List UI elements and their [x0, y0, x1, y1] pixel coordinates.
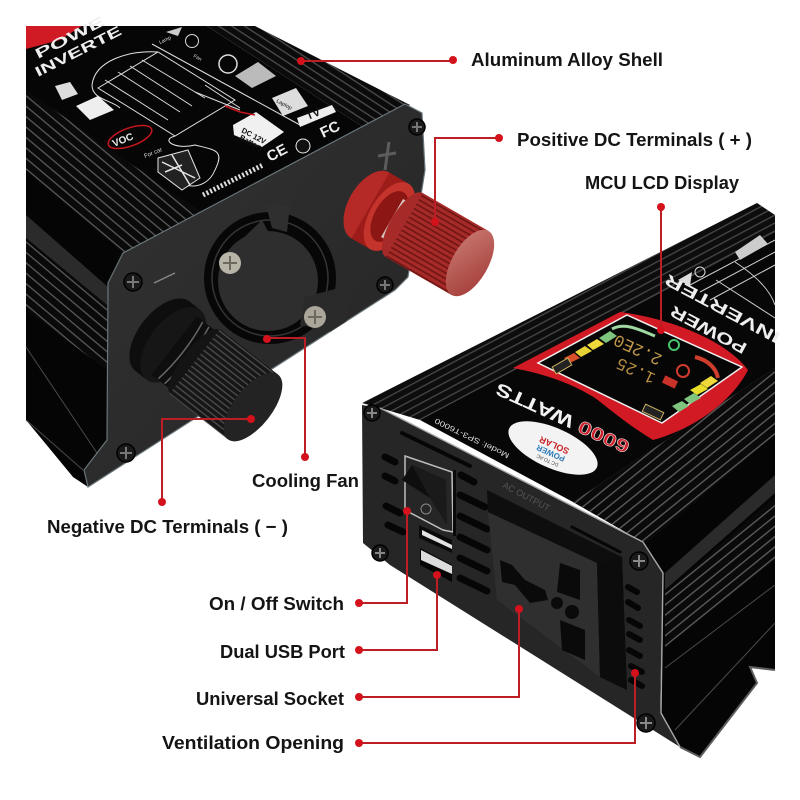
callout: Positive DC Terminals — [431, 129, 752, 226]
left inverter unit — [26, 13, 505, 487]
right inverter unit — [362, 203, 783, 757]
callout: Dual USB Port: Dual USB Port — [220, 641, 345, 662]
plus polarity mark — [378, 142, 396, 170]
6000 WATTS text: 6000 WATTS — [492, 379, 633, 457]
callout: On / Off Switch — [209, 507, 411, 614]
solar power logo — [501, 410, 605, 486]
callout: Aluminum Alloy Shell: Aluminum Alloy Shell — [471, 49, 663, 70]
minus polarity mark — [154, 273, 175, 283]
corner screws, left unit — [117, 119, 425, 462]
left unit label panel: TV — [305, 106, 323, 123]
callout: On / Off Switch: On / Off Switch — [209, 593, 344, 614]
solar power logo: DC TO AC — [535, 452, 560, 467]
right unit label panel: INVERTER — [662, 270, 783, 346]
ventilation slots left of the switch — [385, 433, 620, 591]
right unit label panel — [420, 232, 783, 502]
left unit label panel: VOC — [111, 131, 135, 150]
model text: Model: SP3-T6000 — [433, 416, 511, 460]
left unit label panel: For car — [144, 147, 163, 160]
positive DC terminal knob — [332, 162, 505, 305]
MCU LCD display: 1.25 — [614, 352, 659, 386]
left unit label panel: Lamp — [158, 35, 172, 46]
wiring diagram on right label — [690, 240, 775, 318]
left unit label panel: FC — [318, 118, 343, 142]
callout: Dual USB Port — [220, 571, 441, 662]
right unit mounting flange — [680, 667, 775, 757]
on/off rocker switch — [402, 456, 456, 536]
corner screws, right unit — [364, 405, 655, 732]
cooling fan — [204, 205, 350, 344]
left unit label panel: Battery — [238, 133, 266, 153]
callout: Ventilation Opening: Ventilation Opening — [162, 732, 344, 753]
callout: Negative DC Terminals: Negative DC Terminals ( − ) — [47, 516, 288, 537]
left unit label panel — [26, 13, 363, 212]
solar power logo: SOLAR — [537, 434, 571, 456]
silver fan screws — [219, 252, 326, 328]
left unit label panel: INVERTE — [32, 22, 124, 80]
left unit label panel: Fan — [192, 53, 203, 63]
dual USB port — [419, 525, 452, 582]
POWER INVERTER text: POWER — [667, 301, 750, 356]
left unit label panel: DC 12V — [240, 126, 267, 146]
callout: Universal Socket: Universal Socket — [196, 688, 344, 709]
solar power logo: POWER — [535, 443, 566, 463]
left unit label panel: POWE — [32, 13, 107, 62]
callout: Negative DC Terminals — [47, 415, 288, 537]
left unit top fins — [207, 26, 410, 127]
right unit side fins — [573, 368, 775, 757]
callout: Universal Socket — [196, 605, 523, 709]
negative DC terminal knob — [116, 287, 295, 453]
MCU LCD display: 2.2E0 — [611, 329, 666, 368]
universal socket: AC OUTPUT — [501, 480, 552, 513]
right unit front plate — [362, 405, 680, 747]
left unit front plate — [84, 104, 425, 487]
callout: Positive DC Terminals: Positive DC Terminals ( + ) — [517, 129, 752, 150]
MCU LCD display — [538, 315, 742, 423]
callout: Cooling Fan — [252, 335, 359, 491]
left unit label panel: CE — [264, 141, 290, 166]
callout: Cooling Fan: Cooling Fan — [252, 470, 359, 491]
callout: Ventilation Opening — [162, 669, 639, 753]
right unit top fins — [362, 203, 775, 420]
left unit side fins — [26, 88, 200, 487]
ventilation slots right side — [628, 587, 642, 686]
callout: Aluminum Alloy Shell — [297, 49, 663, 70]
left unit label panel: Laptop — [275, 98, 293, 112]
callout: MCU LCD Display — [585, 172, 740, 334]
callout: MCU LCD Display: MCU LCD Display — [585, 172, 740, 193]
red display backing — [513, 312, 748, 440]
universal socket — [487, 480, 627, 690]
